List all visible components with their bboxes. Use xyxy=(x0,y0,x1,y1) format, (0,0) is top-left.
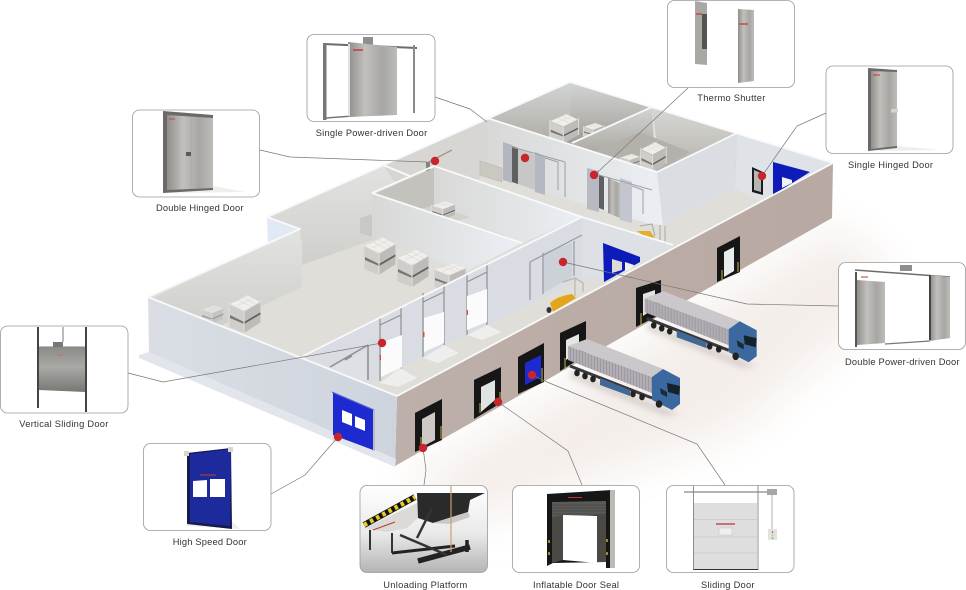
panel: Double Power-driven Door xyxy=(838,262,966,367)
red markers xyxy=(334,154,766,452)
building scene xyxy=(139,82,833,467)
label: High Speed Door xyxy=(173,537,247,547)
forklift, room B xyxy=(546,278,583,313)
plinth xyxy=(139,352,396,467)
truck: near xyxy=(568,339,680,410)
icon: thermo shutter xyxy=(695,1,754,83)
icon: inflatable door seal xyxy=(547,490,615,568)
panel: Vertical Sliding Door xyxy=(0,326,128,429)
room A front wall xyxy=(372,193,522,271)
truck shadow, near xyxy=(570,370,680,416)
dock 4 xyxy=(560,321,586,371)
left wing inner wall xyxy=(153,230,302,326)
right end wall B xyxy=(735,133,833,202)
top wall edges xyxy=(148,82,833,396)
outer left wall xyxy=(148,297,397,466)
room B side wall xyxy=(582,217,673,279)
icon: unloading platform xyxy=(364,485,485,561)
corridor back wall xyxy=(383,118,487,200)
truck shadow, far xyxy=(647,322,757,368)
panel: Unloading Platform xyxy=(360,485,488,590)
icon: sliding door xyxy=(684,486,777,570)
panel: Thermo Shutter xyxy=(668,0,794,103)
room A back faces xyxy=(376,168,434,225)
back room 1 xyxy=(487,82,652,170)
dock 6 xyxy=(717,236,740,282)
dock 5 xyxy=(636,280,661,327)
label: Single Power-driven Door xyxy=(316,128,427,138)
right end wall A xyxy=(657,133,737,225)
vertical door 2 xyxy=(423,283,459,363)
floor xyxy=(148,82,833,396)
panel: Sliding Door xyxy=(666,486,794,590)
icon: double hinged door xyxy=(163,111,245,193)
double power-driven door xyxy=(530,235,582,300)
wall with vertical sliding doors xyxy=(303,217,582,384)
single hinged door xyxy=(752,167,763,195)
icon: single hinged door xyxy=(868,68,940,151)
leader lines xyxy=(128,88,838,494)
panel: Single Hinged Door xyxy=(826,66,953,170)
double hinged door track xyxy=(426,150,452,171)
vertical door 1 xyxy=(380,307,417,387)
racks, big room xyxy=(201,236,466,333)
notch block xyxy=(267,217,300,245)
dock 3 xyxy=(518,343,544,394)
vertical door 3 xyxy=(466,263,502,340)
icon: vertical sliding door xyxy=(37,327,87,412)
high speed door, rear xyxy=(773,162,810,195)
high speed door, room B xyxy=(603,243,640,282)
label: Sliding Door xyxy=(701,580,754,590)
rack in room A xyxy=(432,200,456,220)
front high speed door xyxy=(332,392,374,451)
label: Inflatable Door Seal xyxy=(533,580,619,590)
truck: far xyxy=(645,291,757,362)
back wall, left wing xyxy=(270,165,412,265)
sliding track at left of room xyxy=(330,345,368,388)
label: Vertical Sliding Door xyxy=(19,419,108,429)
icon: double power-driven door xyxy=(855,265,950,347)
icon: high speed door xyxy=(184,447,240,529)
outer right brown wall xyxy=(395,163,833,466)
panel: Inflatable Door Seal xyxy=(512,486,640,590)
panel: Double Hinged Door xyxy=(132,110,260,213)
forklift, corridor xyxy=(637,224,665,244)
small pale panel xyxy=(360,214,372,237)
stacked panel on corridor wall xyxy=(480,161,502,182)
thermo shutter door pair 1 xyxy=(503,142,565,197)
label: Unloading Platform xyxy=(383,580,468,590)
thermo shutter door pair 2 xyxy=(587,168,652,223)
back room 2 xyxy=(572,107,737,180)
label: Thermo Shutter xyxy=(697,93,765,103)
dock 2 xyxy=(474,367,501,419)
wall with sliding doors xyxy=(487,118,663,225)
ground tint xyxy=(395,225,900,520)
label: Double Hinged Door xyxy=(156,203,244,213)
icon: single power-driven door xyxy=(323,37,417,120)
panel: High Speed Door xyxy=(144,444,271,547)
label: Double Power-driven Door xyxy=(845,357,960,367)
panel: Single Power-driven Door xyxy=(307,34,435,138)
dock 1 xyxy=(415,399,442,452)
label: Single Hinged Door xyxy=(848,160,933,170)
